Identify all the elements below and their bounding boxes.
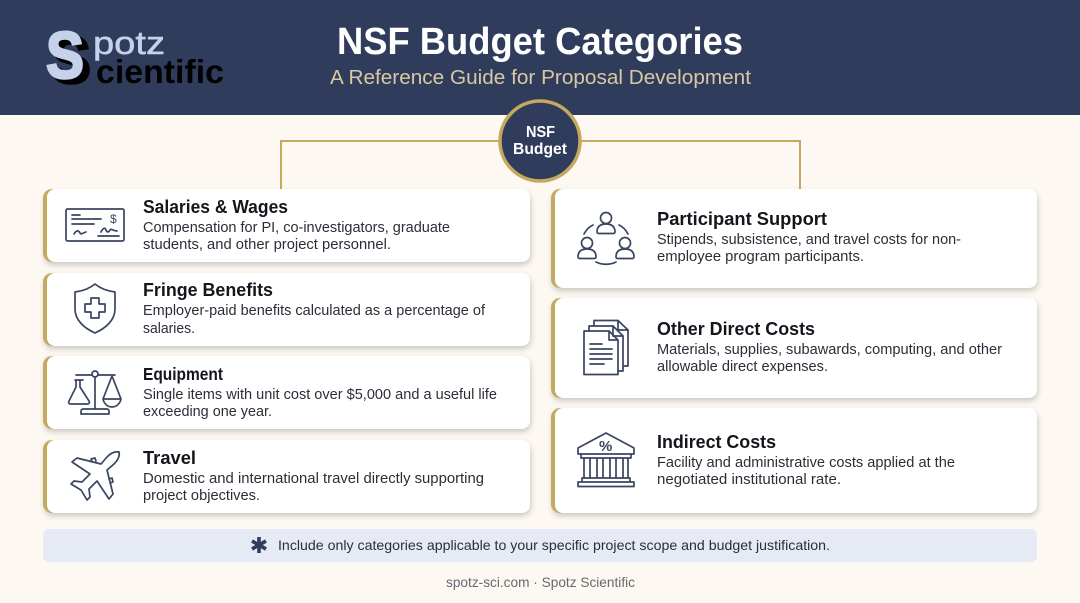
card: Equipment: Single items with unit cost over $5,000 and a useful life bbox=[143, 387, 497, 403]
card: Fringe Benefits: Fringe Benefits bbox=[143, 279, 273, 300]
logo bbox=[46, 18, 224, 97]
footer: spotz-sci.com · Spotz Scientific bbox=[446, 574, 635, 590]
logo: S bbox=[51, 23, 91, 97]
connector lines bbox=[281, 141, 800, 190]
card: Participant Support: Stipends, subsistence, and travel costs for non- bbox=[657, 232, 961, 248]
card: Fringe Benefits: Employer-paid benefits calculated as a percentage of bbox=[143, 303, 486, 319]
card: Other Direct Costs: Other Direct Costs bbox=[657, 318, 815, 339]
card: Indirect Costs: Facility and administrative costs applied at the bbox=[657, 455, 955, 471]
card: Indirect Costs: Indirect Costs bbox=[657, 431, 776, 452]
title: NSF Budget Categories bbox=[337, 21, 743, 63]
icon: institution building with percent bbox=[578, 433, 634, 486]
card: Participant Support: Participant Support bbox=[657, 208, 827, 229]
icon: people in circle bbox=[578, 212, 634, 264]
center node: NSF Budget: NSF bbox=[526, 124, 555, 141]
card: Travel bbox=[43, 440, 530, 513]
header band bbox=[0, 0, 1080, 115]
card: Fringe Benefits bbox=[43, 273, 530, 346]
card: Participant Support bbox=[551, 189, 1037, 288]
icon: check bbox=[66, 209, 124, 241]
logo: cientific bbox=[96, 53, 224, 90]
card: Fringe Benefits: salaries. bbox=[143, 321, 195, 337]
card: Equipment: exceeding one year. bbox=[143, 404, 272, 420]
card: Salaries & Wages: Salaries & Wages bbox=[143, 196, 288, 217]
card: Other Direct Costs bbox=[551, 298, 1037, 398]
icon: asterisk bbox=[252, 537, 266, 553]
icon: airplane bbox=[71, 452, 119, 500]
card: Salaries & Wages: Compensation for PI, co-investigators, graduate bbox=[143, 220, 450, 236]
logo: potz bbox=[93, 25, 165, 61]
card: Indirect Costs: negotiated institutional rate. bbox=[657, 472, 841, 488]
card: Other Direct Costs: allowable direct expenses. bbox=[657, 359, 828, 375]
card: Travel: Travel bbox=[143, 447, 196, 468]
card: Salaries & Wages bbox=[43, 189, 530, 262]
icon: shield with cross bbox=[75, 284, 115, 333]
card: Participant Support: employee program participants. bbox=[657, 249, 864, 265]
logo: S bbox=[46, 18, 84, 92]
icon: check: $ bbox=[110, 212, 117, 226]
card: Indirect Costs bbox=[551, 408, 1037, 513]
card: Travel: project objectives. bbox=[143, 488, 260, 504]
card: Equipment bbox=[43, 356, 530, 429]
footnote bar bbox=[43, 529, 1037, 562]
card: Salaries & Wages: students, and other project personnel. bbox=[143, 237, 391, 253]
center node: NSF Budget bbox=[500, 101, 580, 181]
card: Travel: Domestic and international travel directly supporting bbox=[143, 471, 484, 487]
icon: documents bbox=[584, 320, 628, 374]
center node: NSF Budget: Budget bbox=[513, 141, 567, 158]
footnote bar: Include only categories applicable to your specific project scope and budget justification. bbox=[278, 537, 830, 553]
card: Other Direct Costs: Materials, supplies, subawards, computing, and other bbox=[657, 342, 1002, 358]
icon: scale and flask bbox=[69, 371, 121, 414]
subtitle: A Reference Guide for Proposal Development bbox=[330, 66, 751, 89]
card: Equipment: Equipment bbox=[143, 364, 223, 384]
icon: institution building with percent: % bbox=[599, 438, 612, 455]
